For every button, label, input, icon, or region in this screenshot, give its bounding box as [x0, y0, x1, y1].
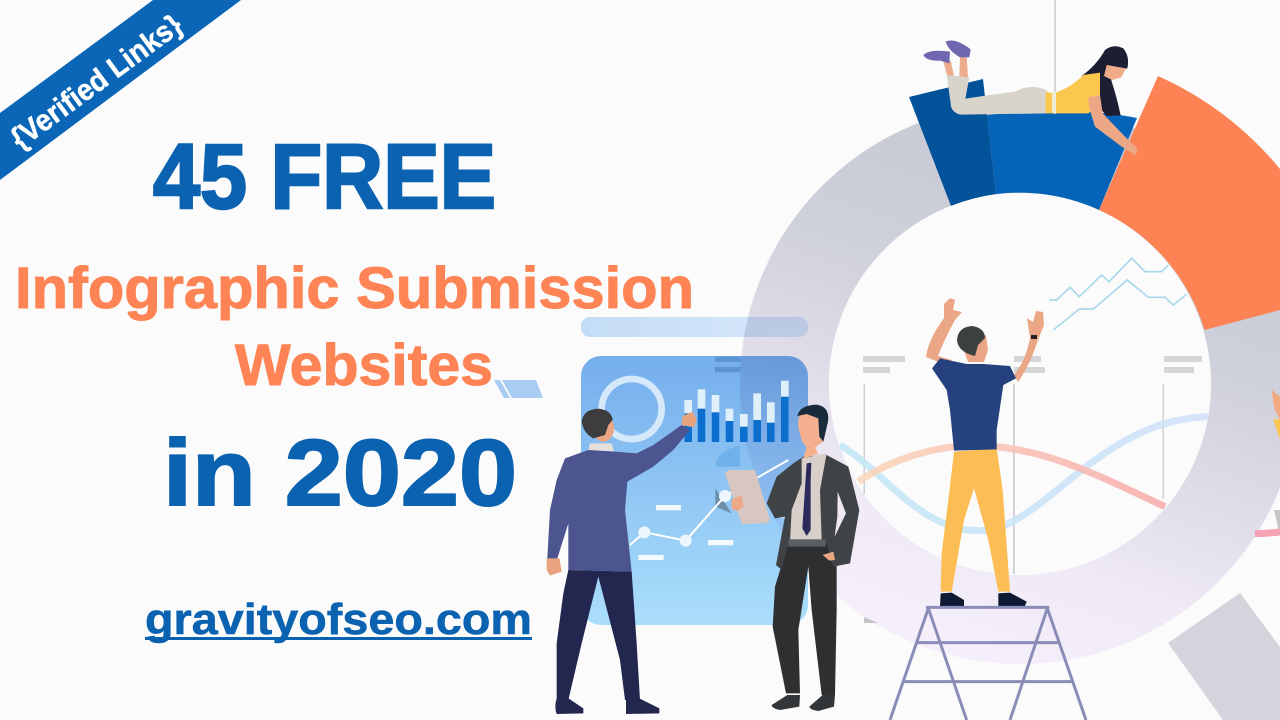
- woman shirt: [1046, 73, 1100, 113]
- man 3 arms: [926, 298, 1044, 382]
- pink wave end: [1255, 532, 1280, 534]
- hanging thread: [1054, 0, 1056, 114]
- dashboard contents: [602, 357, 789, 560]
- thread over shirt: [1052, 92, 1056, 113]
- man 2 shirt: [790, 453, 827, 542]
- woman pants: [947, 75, 1048, 115]
- man 2 jacket: [767, 455, 859, 570]
- chart guide lines: [863, 356, 1280, 623]
- website link: gravityofseo.com: [145, 595, 532, 644]
- ladder: [890, 607, 1086, 720]
- man 2 hair: [797, 405, 828, 442]
- title: in 2020: in 2020: [163, 420, 517, 525]
- tablet: [725, 470, 770, 524]
- man 2 hand: [732, 495, 743, 511]
- sector: orange: [1099, 76, 1280, 330]
- sector: dark blue: [909, 79, 996, 206]
- figure: man on ladder: [890, 298, 1086, 720]
- figure: man with tablet: [725, 405, 859, 711]
- woman calves: [943, 57, 968, 78]
- man 2 trousers: [773, 540, 837, 695]
- figure: man pointing at chart: [547, 409, 697, 714]
- trend lines: [1049, 258, 1187, 330]
- donut inner circle: [829, 193, 1211, 575]
- title: 45 FREE: 45 FREE: [153, 126, 496, 228]
- man 1 hand: [547, 558, 562, 576]
- magnifier handle: [1168, 593, 1280, 720]
- ribbon: verified links: {Verified Links}: [5, 8, 189, 156]
- dashboard board: [581, 356, 808, 625]
- line chart: [630, 460, 788, 560]
- man 2 pocket hand: [823, 552, 835, 561]
- man 3 shoes: [940, 593, 1027, 606]
- man 2 arm gap: [835, 492, 846, 537]
- man 2 belt: [788, 539, 826, 547]
- man 1 raised hand: [682, 412, 697, 427]
- woman hair: [1082, 46, 1128, 116]
- woman face: [1104, 65, 1126, 80]
- man 1 neck: [588, 443, 614, 452]
- woman arm: [1088, 95, 1137, 156]
- bar chart: [684, 381, 789, 442]
- subtitle: Infographic Submission: Infographic Submission: [15, 256, 694, 321]
- man 1 jacket: [547, 425, 690, 572]
- man 1 shoes: [555, 698, 659, 714]
- dashboard top bar: [581, 317, 808, 337]
- man 2 neck and face: [798, 412, 826, 458]
- dashboard shapes behind tablet: [715, 446, 740, 513]
- woman shoes: [923, 41, 971, 63]
- orange wave: [858, 445, 1165, 507]
- man 3 shirt: [932, 358, 1016, 451]
- donut ring: [784, 148, 1256, 620]
- man 3 trousers: [941, 448, 1010, 592]
- man 1 trousers: [557, 570, 640, 700]
- dashboard labels: [715, 357, 741, 372]
- man 2 tie: [802, 463, 811, 536]
- panel: dashboard: [581, 317, 808, 625]
- figure: cropped character at right edge: [1272, 390, 1280, 439]
- man 3 watch: [1031, 335, 1037, 339]
- decorative parallelograms: [494, 380, 543, 398]
- wave lines chart: [840, 417, 1280, 534]
- blue wave: [840, 417, 1208, 531]
- subtitle: Websites: Websites: [235, 333, 493, 398]
- man 3 head: [957, 326, 988, 362]
- man 1 head: [582, 409, 614, 442]
- figure: woman lying on chart: [923, 41, 1137, 156]
- man 2 shoes: [772, 695, 835, 711]
- donut chart on dashboard: [602, 379, 662, 439]
- sector: blue: [987, 111, 1137, 210]
